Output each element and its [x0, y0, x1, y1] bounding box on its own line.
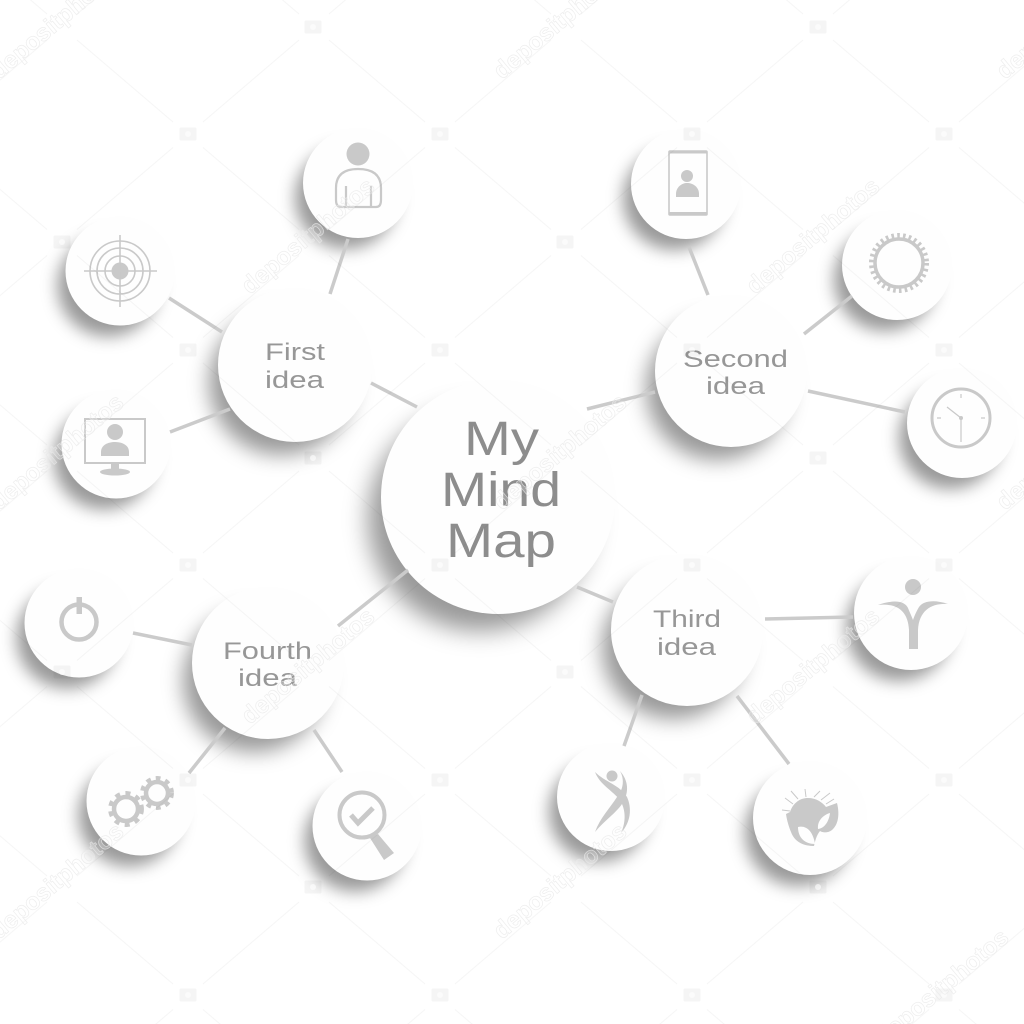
- leaf node: clock: [899, 368, 1017, 489]
- watermark overlay: depositphotos: [488, 389, 632, 516]
- connector: first idea to monitor: [170, 409, 230, 432]
- watermark overlay: depositphotos: [741, 603, 885, 730]
- connector: main to third idea: [577, 587, 613, 602]
- icon: dancing figure: [595, 770, 630, 833]
- leaf node: person: [295, 128, 413, 249]
- icon: person outline: [336, 142, 381, 207]
- connector: main to second idea: [587, 392, 655, 409]
- title: My Mind Map: Mind: [441, 464, 561, 517]
- icon: cog ring: [872, 236, 926, 290]
- label: first idea: First: [265, 339, 325, 366]
- connector: main to fourth idea: [338, 570, 408, 626]
- leaf node: power: [16, 568, 134, 688]
- connector: fourth idea to search: [314, 730, 342, 772]
- watermark overlay: depositphotos: [236, 173, 380, 300]
- icon: power button: [62, 597, 96, 640]
- leaf node: sun and leaf: [745, 761, 867, 886]
- node: second idea: [646, 295, 807, 460]
- node: first idea: [209, 288, 372, 455]
- connector: second idea to clock: [808, 391, 905, 412]
- leaf node: raised arms figure: [846, 556, 968, 681]
- node: fourth idea: [183, 587, 344, 752]
- connector: first idea to target: [169, 298, 222, 332]
- connector: third idea to sun leaf: [737, 696, 789, 764]
- watermark overlay: depositphotos: [488, 818, 632, 945]
- leaf node: target: [58, 216, 174, 336]
- icon: magnifier with check: [340, 792, 394, 860]
- leaf node: phone: [623, 129, 741, 250]
- label: first idea: idea: [265, 367, 325, 394]
- icon: figure with spread arms: [878, 579, 948, 649]
- node: third idea: [602, 554, 763, 719]
- icon: clock: [932, 389, 990, 447]
- connector: third idea to figure: [765, 617, 853, 619]
- leaf node: monitor: [54, 390, 170, 510]
- connector: first idea to person: [330, 239, 348, 294]
- node: main topic: [368, 380, 615, 631]
- title: My Mind Map: My: [464, 413, 539, 466]
- connector: main to first idea: [371, 383, 417, 407]
- label: second idea: idea: [706, 373, 766, 400]
- icon: two gears: [110, 778, 172, 825]
- title: My Mind Map: Map: [446, 515, 556, 568]
- connector: fourth idea to power: [133, 633, 192, 645]
- label: fourth idea: idea: [238, 665, 298, 692]
- label: second idea: Second: [683, 346, 788, 373]
- leaf node: cog ring: [834, 210, 952, 331]
- leaf node: search: [304, 772, 422, 892]
- icon: sun and leaves: [782, 789, 838, 846]
- leaf node: gears: [78, 746, 196, 866]
- title: My Mind Map: [441, 413, 561, 568]
- connector: fourth idea to gears: [189, 728, 225, 773]
- connector: second idea to phone: [689, 247, 708, 295]
- icon: target: [84, 235, 157, 307]
- icon: monitor with user: [85, 419, 145, 476]
- icon: phone with user: [669, 150, 707, 216]
- label: third idea: idea: [657, 634, 717, 661]
- watermark overlay: depositphotos: [741, 173, 885, 300]
- watermark overlay: depositphotos: [236, 603, 380, 730]
- connector: second idea to cog: [804, 296, 852, 334]
- label: third idea: Third: [653, 606, 721, 633]
- leaf node: dancer: [549, 743, 665, 862]
- connector: third idea to dancer: [624, 695, 642, 746]
- label: fourth idea: Fourth: [223, 638, 312, 665]
